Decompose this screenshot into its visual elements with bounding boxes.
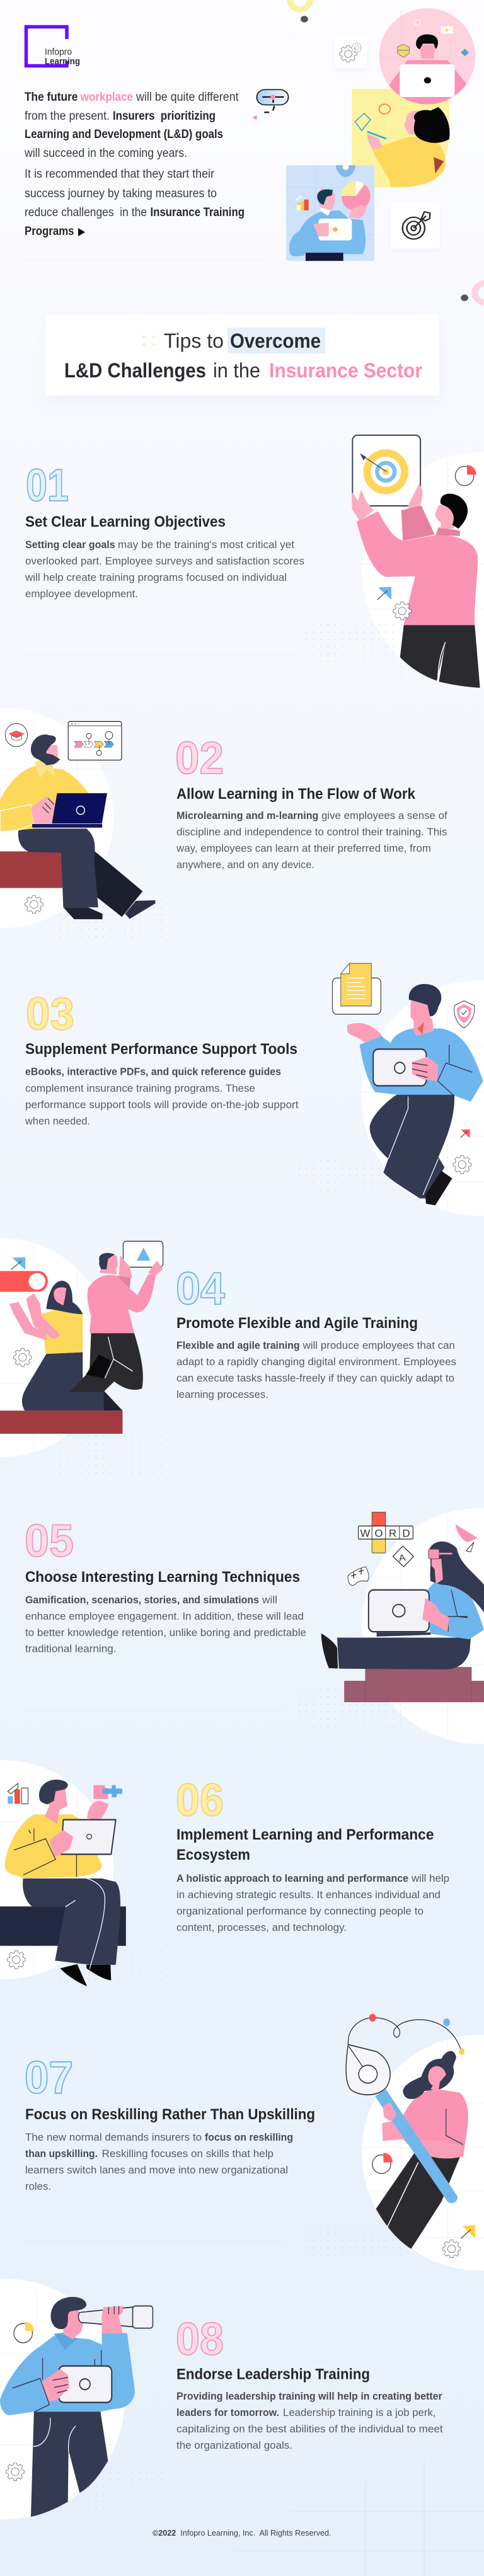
letter tile: A [398,1552,406,1564]
illustration: man with telescope and tablet [0,2291,153,2517]
tooltip slider icon [252,89,288,120]
body 07: Reskilling focuses on skills that help [102,2148,274,2160]
body 06: in achieving strategic results. It enhances individual and [176,1889,441,1901]
target card [391,202,440,249]
body 07: roles. [25,2181,51,2192]
dots 01 [299,624,397,661]
body 04: can execute tasks hassle-freely if they can quickly adapt to [176,1373,454,1384]
number 05: 05 [25,1516,74,1566]
dots 07 [302,2221,403,2260]
pink circle with man and laptop [379,8,475,105]
illustration: man and woman with toggle [0,1241,163,1454]
intro text block: will be quite different [135,90,239,104]
body 07: than upskilling. [25,2148,98,2160]
heading 03: Supplement Performance Support Tools [25,1041,297,1058]
number 04: 04 [176,1264,225,1314]
word puzzle [359,1512,413,1553]
yellow panel with woman [352,89,450,187]
logo: Infopro Learning: Infopro [45,47,72,57]
intro text block: Learning and Development (L&D) goals [25,127,223,141]
body 02: way, employees can learn at their preferred time, from [176,843,431,854]
body 02: anywhere, and on any device. [176,859,314,871]
dots 03 [297,1156,401,1194]
word puzzle: W [360,1527,371,1539]
letter tile [393,1546,413,1567]
dots 05 [295,1688,402,1727]
number 03: 03 [26,989,74,1039]
illustration: woman with VR goggles and laptop [321,1509,484,1740]
illustration: man holding target [352,435,484,688]
body 03: performance support tools will provide on-the-job support [25,1099,299,1111]
body 06: content, processes, and technology. [176,1922,347,1933]
footer copyright: ©2022 Infopro Learning, Inc. All Rights Reserved. [153,2528,331,2538]
body 04: will produce employees that can [302,1340,455,1351]
blue panel with man, tablet and pie chart [286,164,374,261]
title card: Insurance Sector [269,359,422,382]
body 06: will help [411,1873,449,1884]
body 08: Leadership training is a job perk, [283,2407,436,2419]
section 07 [25,2052,315,2192]
gear card [335,35,367,68]
body 04: adapt to a rapidly changing digital environment. Employees [176,1356,456,1368]
body 07: The new normal demands insurers to [25,2132,202,2143]
body 01: may be the training's most critical yet [118,539,294,551]
illustration: woman with magnifier [346,2014,484,2270]
body 06: A holistic approach to learning and performance [176,1873,408,1884]
dots 02 [54,895,164,942]
grey dot [301,16,308,23]
intro text block: Insurance Training [150,205,245,219]
number 07: 07 [25,2052,73,2103]
logo: Infopro Learning: Learning [45,56,80,67]
game controller [348,1567,369,1586]
white circle 05 [362,1508,484,1744]
body 07 [25,2132,293,2192]
decorative pink ring [475,283,484,303]
body 05: will [262,1594,277,1606]
heading 06 [176,1826,434,1863]
intro text block: workplace [80,90,133,104]
body 03: complement insurance training programs. These [25,1083,255,1094]
body 05: Gamification, scenarios, stories, and simulations [25,1594,259,1606]
illustration: man with tablet and puzzle [0,1761,126,1986]
intro text block: from the present. [25,109,110,123]
body 05: enhance employee engagement. In addition, these will lead [25,1611,304,1622]
illustration: man with laptop on bench [0,711,155,919]
white circle 06 [0,1760,113,1979]
white circle 01 [362,452,484,688]
body 08: capitalizing on the best abilities of the individual to meet [176,2424,443,2435]
heading 08: Endorse Leadership Training [176,2366,370,2383]
number 06: 06 [176,1775,224,1826]
title card: L&D Challenges [64,359,206,382]
title card: in the [213,359,260,382]
white circle 08 [0,2279,125,2519]
body 02 [176,810,447,871]
body 01: employee development. [25,588,138,600]
body 08: leaders for tomorrow. [176,2407,279,2419]
word puzzle: O [374,1527,383,1539]
hero illustrations [252,0,484,303]
intro text block: reduce challenges in the [25,205,147,219]
logo: Infopro Learning [26,26,80,67]
body 04: Flexible and agile training [176,1340,300,1351]
section 03 [25,989,299,1127]
white circle 07 [362,2035,484,2270]
body 05: to better knowledge retention, unlike boring and predictable [25,1627,306,1639]
number 01: 01 [26,461,69,511]
heading 06: Ecosystem [176,1846,250,1863]
body 05 [25,1594,306,1654]
body 01: will help create training programs focused on individual [25,572,287,583]
intro text block: will succeed in the coming years. [24,146,187,160]
white circle 04 [0,1238,111,1457]
intro text block: It is recommended that they start their [25,167,214,181]
dots 06 [54,1947,164,1986]
body 01 [25,539,304,600]
body 03: eBooks, interactive PDFs, and quick reference guides [25,1066,281,1077]
intro text block: Insurers prioritizing [113,109,216,123]
word puzzle: R [389,1527,396,1539]
body 06: organizational performance by connecting people to [176,1906,424,1917]
body 01: Setting clear goals [25,539,115,551]
body 08 [176,2391,443,2451]
body 02: give employees a sense of [321,810,447,821]
section 08 [176,2315,443,2451]
body 08: Providing leadership training will help in creating better [176,2391,442,2402]
section 01 [25,461,304,600]
heading 02: Allow Learning in The Flow of Work [176,786,416,803]
dots 08 [68,2470,164,2512]
section 02 [175,733,447,871]
heading 01: Set Clear Learning Objectives [25,513,226,530]
number 08: 08 [176,2315,224,2365]
body 04 [176,1340,456,1400]
title card: Overcome [230,329,321,352]
body 02: Microlearning and m-learning [176,810,318,821]
body 02: discipline and independence to control their training. This [176,827,447,838]
body 07: focus on reskilling [205,2132,293,2143]
intro text block: success journey by taking measures to [25,186,217,200]
body 01: overlooked part. Employee surveys and satisfaction scores [25,556,304,567]
heading 04: Promote Flexible and Agile Training [176,1315,418,1332]
heading 06: Implement Learning and Performance [176,1826,434,1843]
body 05: traditional learning. [25,1643,116,1654]
white circle 03 [362,980,484,1216]
body 03: when needed. [25,1116,90,1127]
body 04: learning processes. [176,1389,268,1400]
intro text block [24,90,245,238]
body 03 [25,1066,299,1127]
title card [45,314,439,396]
decorative dots [289,26,302,45]
body 07: learners switch lanes and move into new organizational [25,2165,288,2176]
section 06 [176,1775,449,1933]
body 06 [176,1873,449,1933]
intro text block: Programs [25,224,74,238]
heading 07: Focus on Reskilling Rather Than Upskilling [25,2106,315,2123]
white circle 02 [0,707,113,928]
number 02: 02 [175,733,224,784]
dots 04 [54,1430,164,1474]
heading 05: Choose Interesting Learning Techniques [25,1569,300,1586]
section 04 [176,1264,456,1400]
section 05 [25,1516,306,1654]
illustration: man with tablet and document [333,963,484,1212]
grey dot right [461,295,468,301]
decorative yellow ring [290,0,310,9]
word puzzle: D [403,1527,410,1539]
title card: Tips to [164,329,224,352]
body 08: the organizational goals. [176,2440,292,2451]
intro text block: The future [25,90,78,104]
